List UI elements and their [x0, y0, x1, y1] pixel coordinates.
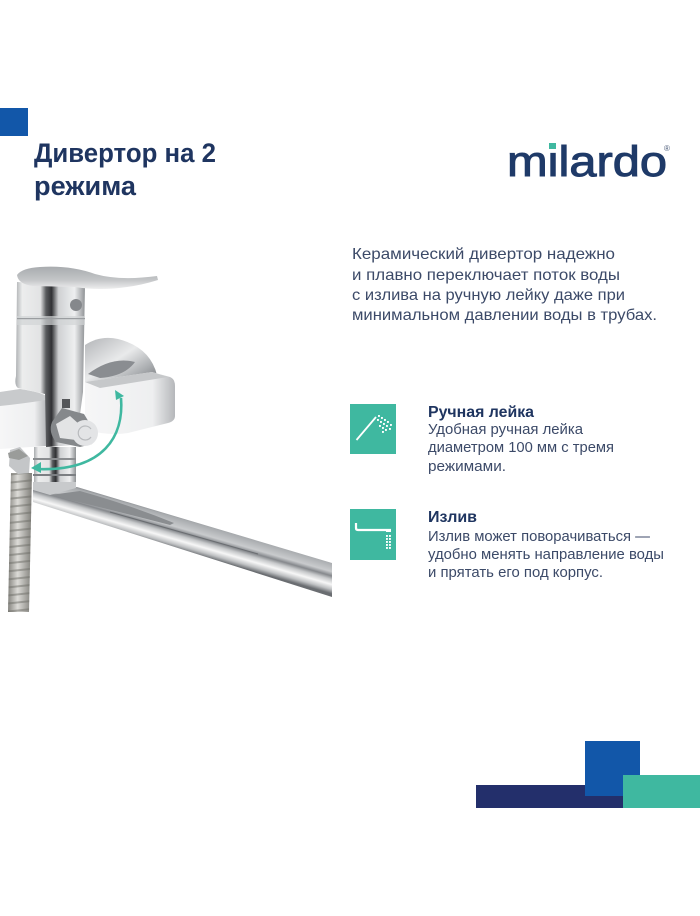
description paragraph: и плавно переключает поток воды	[352, 267, 620, 284]
left side block	[0, 389, 46, 449]
text: spout: и прятать его под корпус.	[428, 565, 603, 581]
text: hand shower: диаметром 100 мм с тремя	[428, 440, 614, 456]
hose	[8, 473, 32, 612]
logo: milardo: ®	[664, 144, 670, 153]
hose nut	[9, 447, 30, 474]
wall mount dome	[85, 338, 157, 385]
heading: spout: Излив	[428, 509, 477, 526]
square wall escutcheon	[85, 372, 175, 434]
title: режима	[34, 171, 137, 201]
text: hand shower: Удобная ручная лейка	[428, 422, 584, 438]
text: hand shower	[428, 422, 614, 475]
neck under the body	[33, 447, 76, 495]
icon: spout	[350, 509, 396, 560]
lever handle	[17, 267, 158, 289]
arrow: water flow switching	[31, 390, 124, 473]
lever pin	[70, 299, 82, 311]
feature: spout	[350, 509, 664, 581]
text: spout	[428, 529, 664, 581]
feature: hand shower	[350, 404, 614, 475]
diverter knob	[51, 399, 98, 447]
logo: milardo: milardo	[507, 138, 667, 186]
spout	[33, 487, 332, 597]
title	[34, 138, 216, 201]
title: Дивертор на 2	[34, 138, 216, 168]
faucet illustration	[0, 267, 332, 612]
description paragraph: Керамический дивертор надежно	[352, 246, 615, 263]
description paragraph	[352, 246, 657, 324]
heading: hand shower: Ручная лейка	[428, 404, 534, 421]
decorative block composition	[476, 741, 700, 808]
icon: hand shower	[350, 404, 396, 454]
text: hand shower: режимами.	[428, 459, 506, 475]
text: spout: Излив может поворачиваться —	[428, 529, 651, 545]
decorative corner square	[0, 108, 28, 136]
main body	[15, 282, 85, 447]
text: spout: удобно менять направление воды	[428, 547, 664, 563]
description paragraph: с излива на ручную лейку даже при	[352, 287, 625, 304]
description paragraph: минимальном давлении воды в трубах.	[352, 307, 657, 324]
